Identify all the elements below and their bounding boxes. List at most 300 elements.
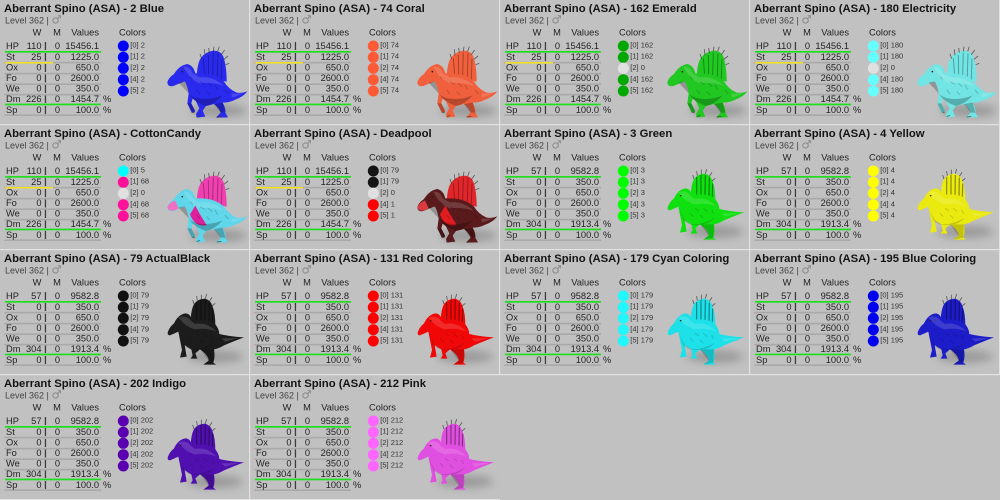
stats table: Fo [256,448,267,458]
icon: spino [418,294,494,365]
panel: 3 Green [504,128,744,241]
stats table: HP [256,416,269,426]
stats table: 0 [536,63,542,73]
colour swatches [118,278,149,346]
stats table: 650.0 [76,313,99,323]
stats table: 15456.1 [65,166,99,176]
stats table: % [603,355,611,365]
stats table: 304 [776,219,792,229]
stats table: 0 [536,105,542,115]
stats table: 110 [27,166,42,176]
stats table: Fo [6,73,17,83]
stats table: 1913.4 [321,469,349,479]
stats table: Dm [756,94,771,104]
stats table [754,152,861,241]
panel: 202 Indigo [4,378,244,491]
stats table: 110 [27,41,42,51]
stats table: 0 [786,177,792,187]
stats table: 0 [55,198,60,208]
colour swatches: [0] 74 [380,41,399,50]
stats table: Fo [256,323,267,333]
stats table: 0 [286,355,292,365]
stats table: 0 [536,209,542,219]
stats table: Ox [756,63,768,73]
stats table: 0 [555,166,560,176]
stats table: Values [571,152,599,162]
colour swatches: Colors [619,152,646,162]
stats table: HP [756,166,769,176]
stats table: 0 [36,230,42,240]
stats table: 0 [286,480,292,490]
stats table: 0 [55,209,60,219]
icon: spino [668,294,744,365]
stats table [4,402,111,491]
stats table: 0 [36,459,42,469]
stats table: 0 [286,84,292,94]
colour swatches: [2] 0 [130,188,145,197]
stats table: 9582.8 [571,166,599,176]
stats table: 2600.0 [321,323,349,333]
stats table: 1225.0 [71,52,99,62]
colour swatches [868,28,903,96]
colour swatches: [1] 202 [130,427,153,436]
stats table: Fo [756,73,767,83]
stats table: Values [71,152,99,162]
icon: spino [918,294,994,365]
colour swatches: [0] 212 [380,416,403,425]
stats table: M [303,402,311,412]
colour swatches: [4] 4 [880,199,895,208]
stats table: Ox [756,188,768,198]
colour swatches: [5] 3 [630,211,645,220]
stats table: 350.0 [76,302,99,312]
panel: 4 Yellow [754,128,994,241]
stats table: 0 [286,448,292,458]
stats table: 9582.8 [571,291,599,301]
stats table: 15456.1 [815,41,849,51]
icon: spino [917,47,997,118]
stats table: 0 [536,334,542,344]
stats table [504,152,611,241]
stats table: 0 [555,291,560,301]
colour swatches: [0] 202 [130,416,153,425]
stats table: 25 [281,177,292,187]
stats table: 226 [276,94,292,104]
stats table: HP [256,166,269,176]
level and sex: Level 362 | ♂ [5,262,62,276]
stats table: M [803,152,811,162]
stats table: We [756,209,770,219]
stats table: 57 [781,291,792,301]
stats table: % [103,219,111,229]
stats table: 0 [305,198,310,208]
stats table: 0 [55,41,60,51]
stats table: HP [6,41,19,51]
colour swatches: [0] 195 [880,291,903,300]
stats table: 650.0 [76,63,99,73]
stats table: 0 [786,188,792,198]
stats table: Fo [256,198,267,208]
colour swatches: [1] 68 [130,177,149,186]
stats table: 0 [305,480,310,490]
colour swatches: [1] 131 [380,302,403,311]
stats table: 0 [36,480,42,490]
stats table: 0 [55,448,60,458]
stats table: Fo [506,323,517,333]
title: Aberrant Spino (ASA) - 4 Yellow [754,128,925,140]
stats table: 110 [527,41,542,51]
colour swatches: [2] 195 [880,313,903,322]
level and sex: Level 362 | ♂ [255,388,312,402]
stats table: St [256,52,265,62]
stats table: 0 [55,291,60,301]
panel: 2 Blue [4,3,247,118]
stats table: 100.0 [576,355,599,365]
stats table: W [783,28,792,38]
title: Aberrant Spino (ASA) - 195 Blue Coloring [754,253,976,265]
stats table: 0 [286,209,292,219]
stats table: 1913.4 [571,344,599,354]
stats table: M [553,28,561,38]
stats table: 0 [536,355,542,365]
stats table: 226 [26,219,42,229]
colour swatches: [5] 162 [630,86,653,95]
stats table: 0 [786,105,792,115]
stats table: 100.0 [576,230,599,240]
stats table: W [533,278,542,288]
stats table: Dm [756,219,771,229]
stats table: 226 [26,94,42,104]
stats table: 0 [805,323,810,333]
stats table: 1454.7 [571,94,599,104]
stats table: 15456.1 [565,41,599,51]
colour swatches: [0] 4 [880,166,895,175]
stats table: 0 [555,177,560,187]
stats table: 100.0 [326,355,349,365]
stats table: % [853,344,861,354]
colour swatches [868,278,903,346]
stats table: % [603,94,611,104]
stats table: 0 [805,177,810,187]
stats table: 100.0 [326,105,349,115]
stats table: 0 [555,323,560,333]
stats table: M [553,152,561,162]
stats table: 0 [305,52,310,62]
colour swatches: [2] 131 [380,313,403,322]
stats table: 9582.8 [821,166,849,176]
stats table: % [103,230,111,240]
stats table: 0 [305,166,310,176]
stats table: 350.0 [76,209,99,219]
stats table: 0 [305,41,310,51]
stats table: 650.0 [826,313,849,323]
stats table: Dm [256,94,271,104]
panel: 131 Red Coloring [254,253,494,366]
stats table: 0 [286,188,292,198]
colour swatches: [1] 179 [630,302,653,311]
stats table: Fo [756,198,767,208]
stats table: 1454.7 [321,219,349,229]
stats table: Sp [756,355,767,365]
stats table: 0 [55,230,60,240]
stats table: % [603,105,611,115]
title: Aberrant Spino (ASA) - 212 Pink [254,378,427,390]
stats table: Dm [256,469,271,479]
level and sex: Level 362 | ♂ [505,138,562,152]
colour swatches: [1] 212 [380,427,403,436]
colour swatches [368,152,399,222]
colour swatches: Colors [119,278,146,288]
icon: spino [667,47,747,118]
colour swatches: [2] 74 [380,63,399,72]
stats table: 350.0 [826,84,849,94]
colour swatches [368,278,403,346]
colour swatches: [2] 0 [380,188,395,197]
stats table: 57 [31,416,42,426]
stats table: 0 [55,427,60,437]
colour swatches [368,402,403,472]
colour swatches: [4] 2 [130,74,145,83]
colour swatches: [2] 79 [130,313,149,322]
stats table: Dm [6,469,21,479]
colour swatches: [0] 131 [380,291,403,300]
stats table: 0 [55,177,60,187]
stats table: 0 [786,313,792,323]
stats table [254,402,361,491]
stats table: Values [821,28,849,38]
title: Aberrant Spino (ASA) - Deadpool [254,128,432,140]
stats table: 0 [55,416,60,426]
stats table: W [783,278,792,288]
stats table: We [506,209,520,219]
stats table: % [353,469,361,479]
stats table: 650.0 [326,63,349,73]
stats table: Ox [6,188,18,198]
colour swatches: [1] 180 [880,52,903,61]
stats table: We [6,84,20,94]
stats table: Fo [6,198,17,208]
stats table: 0 [305,459,310,469]
stats table: 0 [805,94,810,104]
colour swatches: [4] 179 [630,324,653,333]
colour swatches [118,402,153,472]
level and sex: Level 362 | ♂ [255,262,312,276]
stats table: 0 [805,313,810,323]
stats table: 0 [786,334,792,344]
stats table: 0 [805,52,810,62]
stats table: HP [6,416,19,426]
stats table: 350.0 [826,334,849,344]
stats table: 350.0 [576,334,599,344]
stats table: 0 [805,188,810,198]
stats table: % [353,355,361,365]
stats table: 350.0 [326,84,349,94]
colour swatches: [4] 195 [880,324,903,333]
stats table: % [853,230,861,240]
stats table: 0 [555,84,560,94]
stats table: 1913.4 [71,344,99,354]
icon: spino [417,172,497,243]
stats table: 0 [55,188,60,198]
stats table: 0 [55,313,60,323]
stats table: M [53,402,61,412]
stats table: M [803,28,811,38]
stats table [254,28,361,116]
stats table: Dm [6,94,21,104]
colour swatches: [4] 212 [380,449,403,458]
stats table: 226 [776,94,792,104]
stats table: 0 [286,323,292,333]
colour swatches [118,28,146,96]
stats table: HP [756,41,769,51]
colour swatches: [4] 180 [880,74,903,83]
icon: spino [668,169,744,240]
level and sex: Level 362 | ♂ [5,12,62,26]
stats table [4,278,111,366]
stats table: 0 [55,84,60,94]
stats table: We [756,84,770,94]
stats table: 304 [276,344,292,354]
icon: spino [918,169,994,240]
stats table: Sp [256,230,267,240]
stats table: 110 [277,41,292,51]
stats table: 100.0 [76,230,99,240]
colour swatches: [4] 79 [130,324,149,333]
colour swatches: [2] 0 [880,63,895,72]
colour swatches: [5] 180 [880,86,903,95]
stats table: 0 [286,63,292,73]
stats table: % [353,230,361,240]
stats table: 9582.8 [321,291,349,301]
stats table: 350.0 [826,209,849,219]
stats table: 350.0 [326,459,349,469]
stats table: 0 [36,63,42,73]
stats table: We [6,334,20,344]
colour swatches: [0] 2 [130,41,145,50]
stats table: Sp [506,230,517,240]
stats table: 350.0 [826,302,849,312]
colour swatches [118,152,149,222]
stats table: Values [571,28,599,38]
colour swatches: [0] 79 [380,166,399,175]
title: Aberrant Spino (ASA) - 202 Indigo [4,378,186,390]
stats table: 2600.0 [821,198,849,208]
stats table: Dm [506,94,521,104]
stats table: 0 [305,84,310,94]
colour swatches: [5] 4 [880,211,895,220]
stats table: 25 [31,177,42,187]
stats table: 1454.7 [821,94,849,104]
stats table: Values [71,278,99,288]
stats table: 0 [55,52,60,62]
colour swatches: Colors [119,402,146,412]
title: Aberrant Spino (ASA) - 131 Red Coloring [254,253,473,265]
stats table: 0 [555,313,560,323]
stats table: 0 [286,438,292,448]
stats table: 25 [281,52,292,62]
stats table: 0 [305,302,310,312]
colour swatches: [4] 202 [130,449,153,458]
stats table: 0 [286,427,292,437]
stats table: Ox [256,313,268,323]
stats table: St [6,302,15,312]
stats table: 350.0 [576,177,599,187]
level and sex: Level 362 | ♂ [755,12,812,26]
stats table: 226 [276,219,292,229]
stats table: 0 [305,73,310,83]
stats table: Values [321,152,349,162]
stats table: 1454.7 [71,94,99,104]
stats table: 0 [536,177,542,187]
colour swatches: [2] 179 [630,313,653,322]
stats table: 350.0 [326,427,349,437]
stats table: St [506,52,515,62]
stats table: Sp [506,355,517,365]
stats table: 0 [555,344,560,354]
stats table: M [53,278,61,288]
stats table: 0 [536,73,542,83]
colour swatches: [1] 162 [630,52,653,61]
stats table: 57 [281,291,292,301]
stats table: 0 [36,302,42,312]
stats table: 0 [786,355,792,365]
stats table: % [103,105,111,115]
stats table: 0 [55,73,60,83]
stats table: 0 [555,198,560,208]
stats table: W [283,278,292,288]
stats table: 650.0 [326,188,349,198]
stats table: 2600.0 [321,198,349,208]
level and sex: Level 362 | ♂ [5,138,62,152]
stats table: 304 [26,344,42,354]
stats table: 0 [36,73,42,83]
colour swatches: [1] 79 [130,302,149,311]
stats table: St [6,52,15,62]
stats table: We [6,459,20,469]
stats table: 650.0 [576,188,599,198]
stats table: Values [321,278,349,288]
stats table: HP [6,291,19,301]
stats table: Ox [256,63,268,73]
colour swatches: [5] 195 [880,336,903,345]
stats table: 0 [286,313,292,323]
stats table: 2600.0 [71,448,99,458]
stats table: Values [71,402,99,412]
colour swatches: [2] 4 [880,188,895,197]
title: Aberrant Spino (ASA) - CottonCandy [4,128,202,140]
colour swatches: [5] 131 [380,336,403,345]
icon: spino [418,419,494,490]
stats table: 0 [36,438,42,448]
stats table [4,28,111,116]
colour swatches: [4] 74 [380,74,399,83]
stats table: 0 [786,198,792,208]
stats table: 25 [531,52,542,62]
colour swatches: Colors [119,28,146,38]
stats table [4,152,111,241]
stats table: 15456.1 [315,166,349,176]
level and sex: Level 362 | ♂ [755,138,812,152]
stats table: 0 [805,209,810,219]
stats table: 650.0 [76,188,99,198]
stats table: M [803,278,811,288]
level and sex: Level 362 | ♂ [255,138,312,152]
stats table: HP [256,291,269,301]
stats table: 0 [305,188,310,198]
stats table: 100.0 [76,105,99,115]
panel: 79 ActualBlack [4,253,244,366]
stats table: We [256,459,270,469]
